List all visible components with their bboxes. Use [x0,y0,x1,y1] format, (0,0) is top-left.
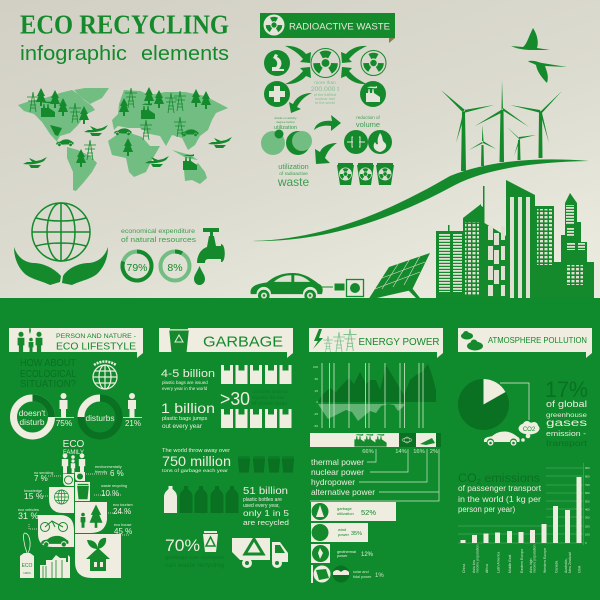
y axis labels: 500 [585,500,590,504]
percent labels: no smoking [34,471,53,475]
title: elements [141,43,229,65]
bar: wind power: power [338,532,350,537]
hands [14,247,108,285]
globe [32,203,90,261]
text: utilization of radioactive waste: of radioactive [279,171,308,177]
bar: solar and tidal power: tidal power [353,575,372,579]
percent labels: knowledge [24,489,42,493]
text: 4-5 billion: every year in the world [162,386,208,391]
arrows [285,46,367,164]
percent labels: eco house [114,523,132,527]
bar: solar and tidal power [311,565,384,583]
text: 1 billion: 1 billion [161,400,215,416]
vertical lines [322,363,423,428]
x axis labels: income population [532,545,536,573]
city skyline [436,180,594,298]
bar: wind power [311,523,368,542]
area chart [313,363,436,428]
text: 4-5 billion [161,368,215,391]
text: CO2 emissions: 2 [477,479,481,486]
wind turbines [441,80,562,171]
percent labels [18,465,133,536]
icon: eco tag and city: ECO [22,563,33,569]
percent labels: 24 % [113,507,131,516]
text: CO2 emissions: in the world (1 kg per [458,495,541,504]
text: more than 200,000 t: nuclear fuel [315,97,335,101]
axis labels: 0 [316,400,318,404]
text: divide [274,116,297,131]
text: >30 [220,389,289,409]
grid [458,463,584,545]
map icons [23,87,232,170]
x axis labels: Latin America [496,552,500,573]
donut: disturbs: disturbs [85,413,115,423]
icon: CO2 cloud and car: CO2 [523,427,536,433]
text: more than 200,000 t: more than [314,80,336,86]
text: eco family [63,439,85,456]
text: divide: utilization [274,125,297,131]
text: 4-5 billion: plastic bags are issued [162,380,208,385]
text: 17% of global: gases [546,418,587,429]
title: infographic [20,43,127,65]
percent labels: environmentally [95,465,122,469]
panel: radioactive waste [260,13,395,189]
bar: wind power: 35% [351,531,362,537]
text: >30: countries forbid or [252,389,289,394]
donut: 8%: 8% [167,262,183,274]
person 75%: 75% [56,418,73,428]
donut: doesn't disturb: doesn't [19,408,46,418]
icon row: plastic bags bottom [221,409,292,428]
donut: 8% [160,252,190,280]
connector lines [310,449,439,501]
x axis labels: Western Europe [543,548,547,573]
x axis labels: Middle East [508,555,512,573]
map continents [18,88,228,191]
text: divide: divide on activity [274,116,297,120]
text: 51 billion: used every year, [243,503,280,509]
text: >30: of plastic bags [252,401,287,407]
text: economical expenditure: of natural resources [121,235,196,244]
icon: faucet and drop [194,228,225,285]
energy type labels [311,457,375,497]
text: 51 billion: plastic bottles are [243,497,282,503]
icon: eco tag and city: 100% [23,571,31,575]
bar: garbage utilization: utilization [337,511,354,516]
icons circles [264,48,386,107]
y axis labels: 700 [585,483,590,487]
bar: garbage utilization: garbage [337,506,352,511]
icon: globe in hands [14,203,108,285]
text: CO2 emissions: person per year) [458,505,516,514]
percent labels: eco tourism [113,503,133,507]
text: 750 million [162,448,231,474]
donut: 79% [122,252,152,280]
icon: compress and fire [344,130,392,154]
icon: recycling truck [232,538,288,568]
panel: eco lifestyle [9,328,143,578]
bar: garbage utilization: 52% [361,508,376,517]
donut: doesn't disturb [14,398,52,436]
bar: geothermal power: 12% [361,552,374,558]
bar percent labels [362,449,438,455]
text: CO2 emissions: of passenger transport [458,484,542,493]
donut: disturbs [81,398,119,436]
text: 1 billion: out every year [162,423,202,430]
text: 1 billion [161,400,215,430]
text: 1 billion: plastic bags jumps [162,416,207,422]
y axis labels: 400 [585,508,590,512]
axis labels [313,365,318,428]
bar: solar and tidal power: solar and [353,570,369,574]
buildings [436,180,594,298]
text: >30: regulate the use [252,395,285,400]
text: reduction of volume: reduction of [356,115,381,120]
y axis labels: 100 [585,532,590,536]
y axis labels [585,466,590,545]
text: 51 billion [243,485,289,527]
icon: globe with trees [93,362,117,389]
header: eco lifestyle: PERSON AND NATURE - [56,333,136,340]
text: eco family: FAMILY [63,450,84,456]
bottom green background [0,298,600,600]
text: 51 billion: 51 billion [243,485,288,497]
car with plug [251,273,364,301]
energy type labels: nuclear power [311,467,364,477]
y axis labels: 900 [585,466,590,470]
text: reduction of volume [356,115,381,129]
icon: eco tag and city [20,533,70,578]
text: 70% [165,536,225,569]
text: 17% of global: 17% [545,377,588,402]
text: CO2 emissions: CO [458,473,475,485]
text: economical expenditure [121,228,196,244]
x axis labels: Eastern Europe [520,549,524,573]
x axis labels: China [462,564,466,573]
leaf infographic [38,472,121,578]
y axis labels: 0 [585,541,587,545]
percent labels: 45 % [114,527,132,536]
text: utilization of radioactive waste: waste [277,175,309,189]
percent labels: 15 % [24,491,44,501]
percent labels: waste recycling [101,484,127,488]
x axis labels [462,545,582,573]
icon: recycling bin [203,531,218,552]
bar percent labels: 2% [430,449,438,455]
bar: garbage utilization [311,502,396,521]
windows [439,197,585,298]
x axis labels: Africa [485,564,489,573]
person 21% [123,393,142,428]
person 75% [55,393,74,428]
bar percent labels: 14% [395,449,407,455]
text: 70%: garbage can contains [165,555,225,561]
bar: solar and tidal power: 1% [375,573,384,579]
icon: CO2 cloud and car [484,421,540,446]
percent labels: 31 % [18,511,39,521]
bar: geothermal power [311,544,374,563]
x axis labels: Australia, [564,558,568,573]
icon: birds [511,28,567,83]
text: 17% of global: of global [546,399,587,409]
icon: overlapping circles [261,130,312,155]
text: 17% of global: transport [546,439,588,448]
icon row: plastic bags top [221,365,292,384]
energy type labels: alternative power [311,487,375,497]
x axis labels: Asia low [472,559,476,573]
axis labels: -50 [314,424,318,428]
header: eco lifestyle [9,328,143,358]
connector line [500,383,529,420]
bar chart: CO2 by region [458,463,590,573]
solar panel [368,253,430,300]
header: eco lifestyle: ECO LIFESTYLE [56,340,136,352]
bar percent labels: 66% [362,449,374,455]
header: radioactive waste: RADIOACTIVE WASTE [289,22,390,32]
text: 750 million: The world throw away over [162,448,230,454]
text: more than 200,000 t: 200.000 t [311,86,339,93]
text: 750 million: tons of garbage each year [162,468,228,474]
x axis labels: New Zealand [568,552,572,573]
dark area [318,364,436,402]
bar: geothermal power: geothermal [337,550,356,554]
text: >30: >30 [220,389,250,409]
panel: energy power [309,328,443,583]
text: how about ecological situation: HOW ABOUT [20,358,76,369]
y axis labels: 200 [585,524,590,528]
header: atmosphere pollution [458,328,592,358]
bars [460,477,582,543]
percent labels: eco vehicles [18,508,39,512]
text: divide: degree before [276,120,295,124]
donut: doesn't disturb: disturb [20,417,45,427]
pie chart [458,379,509,430]
text: more than 200,000 t: in the world [315,101,335,105]
header: radioactive waste [260,13,395,43]
axis labels: 25 [315,389,318,393]
header: atmosphere pollution: ATMOSPHERE POLLUTION [488,336,587,345]
text: CO2 emissions: emissions [481,473,540,485]
text: 70%: can waste recycling [165,563,224,569]
y axis labels: 800 [585,474,590,478]
text: 17% of global: greenhouse [546,412,587,419]
percent labels: 7 % [34,474,48,483]
text: CO2 emissions [458,473,542,514]
text: economical expenditure: economical expenditure [121,228,196,235]
text: utilization of radioactive waste [277,162,309,189]
x axis labels: Canada [554,561,558,573]
axis labels: 100 [313,365,318,369]
axis labels: -25 [314,412,318,416]
percent labels: friendly [95,470,107,474]
text: 70%: 70% [165,536,200,555]
title [20,10,229,65]
light area [318,404,405,421]
bar: wind power: wind [338,527,346,532]
x axis labels: Asia high [529,559,533,573]
bar percent labels: 16% [413,449,425,455]
icon: family [62,453,85,473]
percent labels: 10 % [101,489,119,498]
world map [18,87,232,191]
text: 4-5 billion: 4-5 billion [161,368,215,380]
text: utilization of radioactive waste: utilization [278,162,309,171]
text: 51 billion: only 1 in 5 [243,508,289,518]
bar: geothermal power: power [337,554,348,558]
icon row: bottles [164,486,238,513]
text: 17% of global [545,377,588,448]
text: reduction of volume: volume [356,120,380,129]
x axis labels: income population [476,545,480,573]
text: 51 billion: are recycled [243,520,289,527]
percent labels: 6 % [110,469,124,478]
header: garbage [159,328,293,358]
top background [0,0,600,298]
header: energy power [309,328,443,358]
text: eco family: ECO [63,439,85,450]
text: 17% of global: emission - [546,429,587,438]
text: how about ecological situation: ECOLOGICAL [20,369,76,380]
text: how about ecological situation: SITUATION? [20,379,76,390]
energy type labels: thermal power [311,457,364,467]
person 21%: 21% [125,419,141,428]
header: energy power: ENERGY POWER [358,337,440,348]
y axis labels: 300 [585,516,590,520]
icon: bins [337,163,394,185]
donut: 79%: 79% [126,262,148,274]
title: ECO RECYCLING [20,10,229,40]
text: 750 million: 750 million [162,454,231,469]
panel: garbage [159,328,294,569]
hill curve [250,159,589,241]
x axis labels: USA [578,565,582,573]
y axis labels: 600 [585,491,590,495]
text: how about ecological situation [20,358,76,390]
energy type labels: hydropower [311,477,355,487]
text: more than 200,000 t [311,80,339,105]
stacked bar [310,433,441,447]
text: more than 200,000 t: of the fulfilled [314,93,336,97]
header: garbage: GARBAGE [203,334,283,350]
panel: atmosphere pollution [458,328,592,573]
icon row: dark bins [238,456,294,473]
axis labels: 50 [315,377,318,381]
